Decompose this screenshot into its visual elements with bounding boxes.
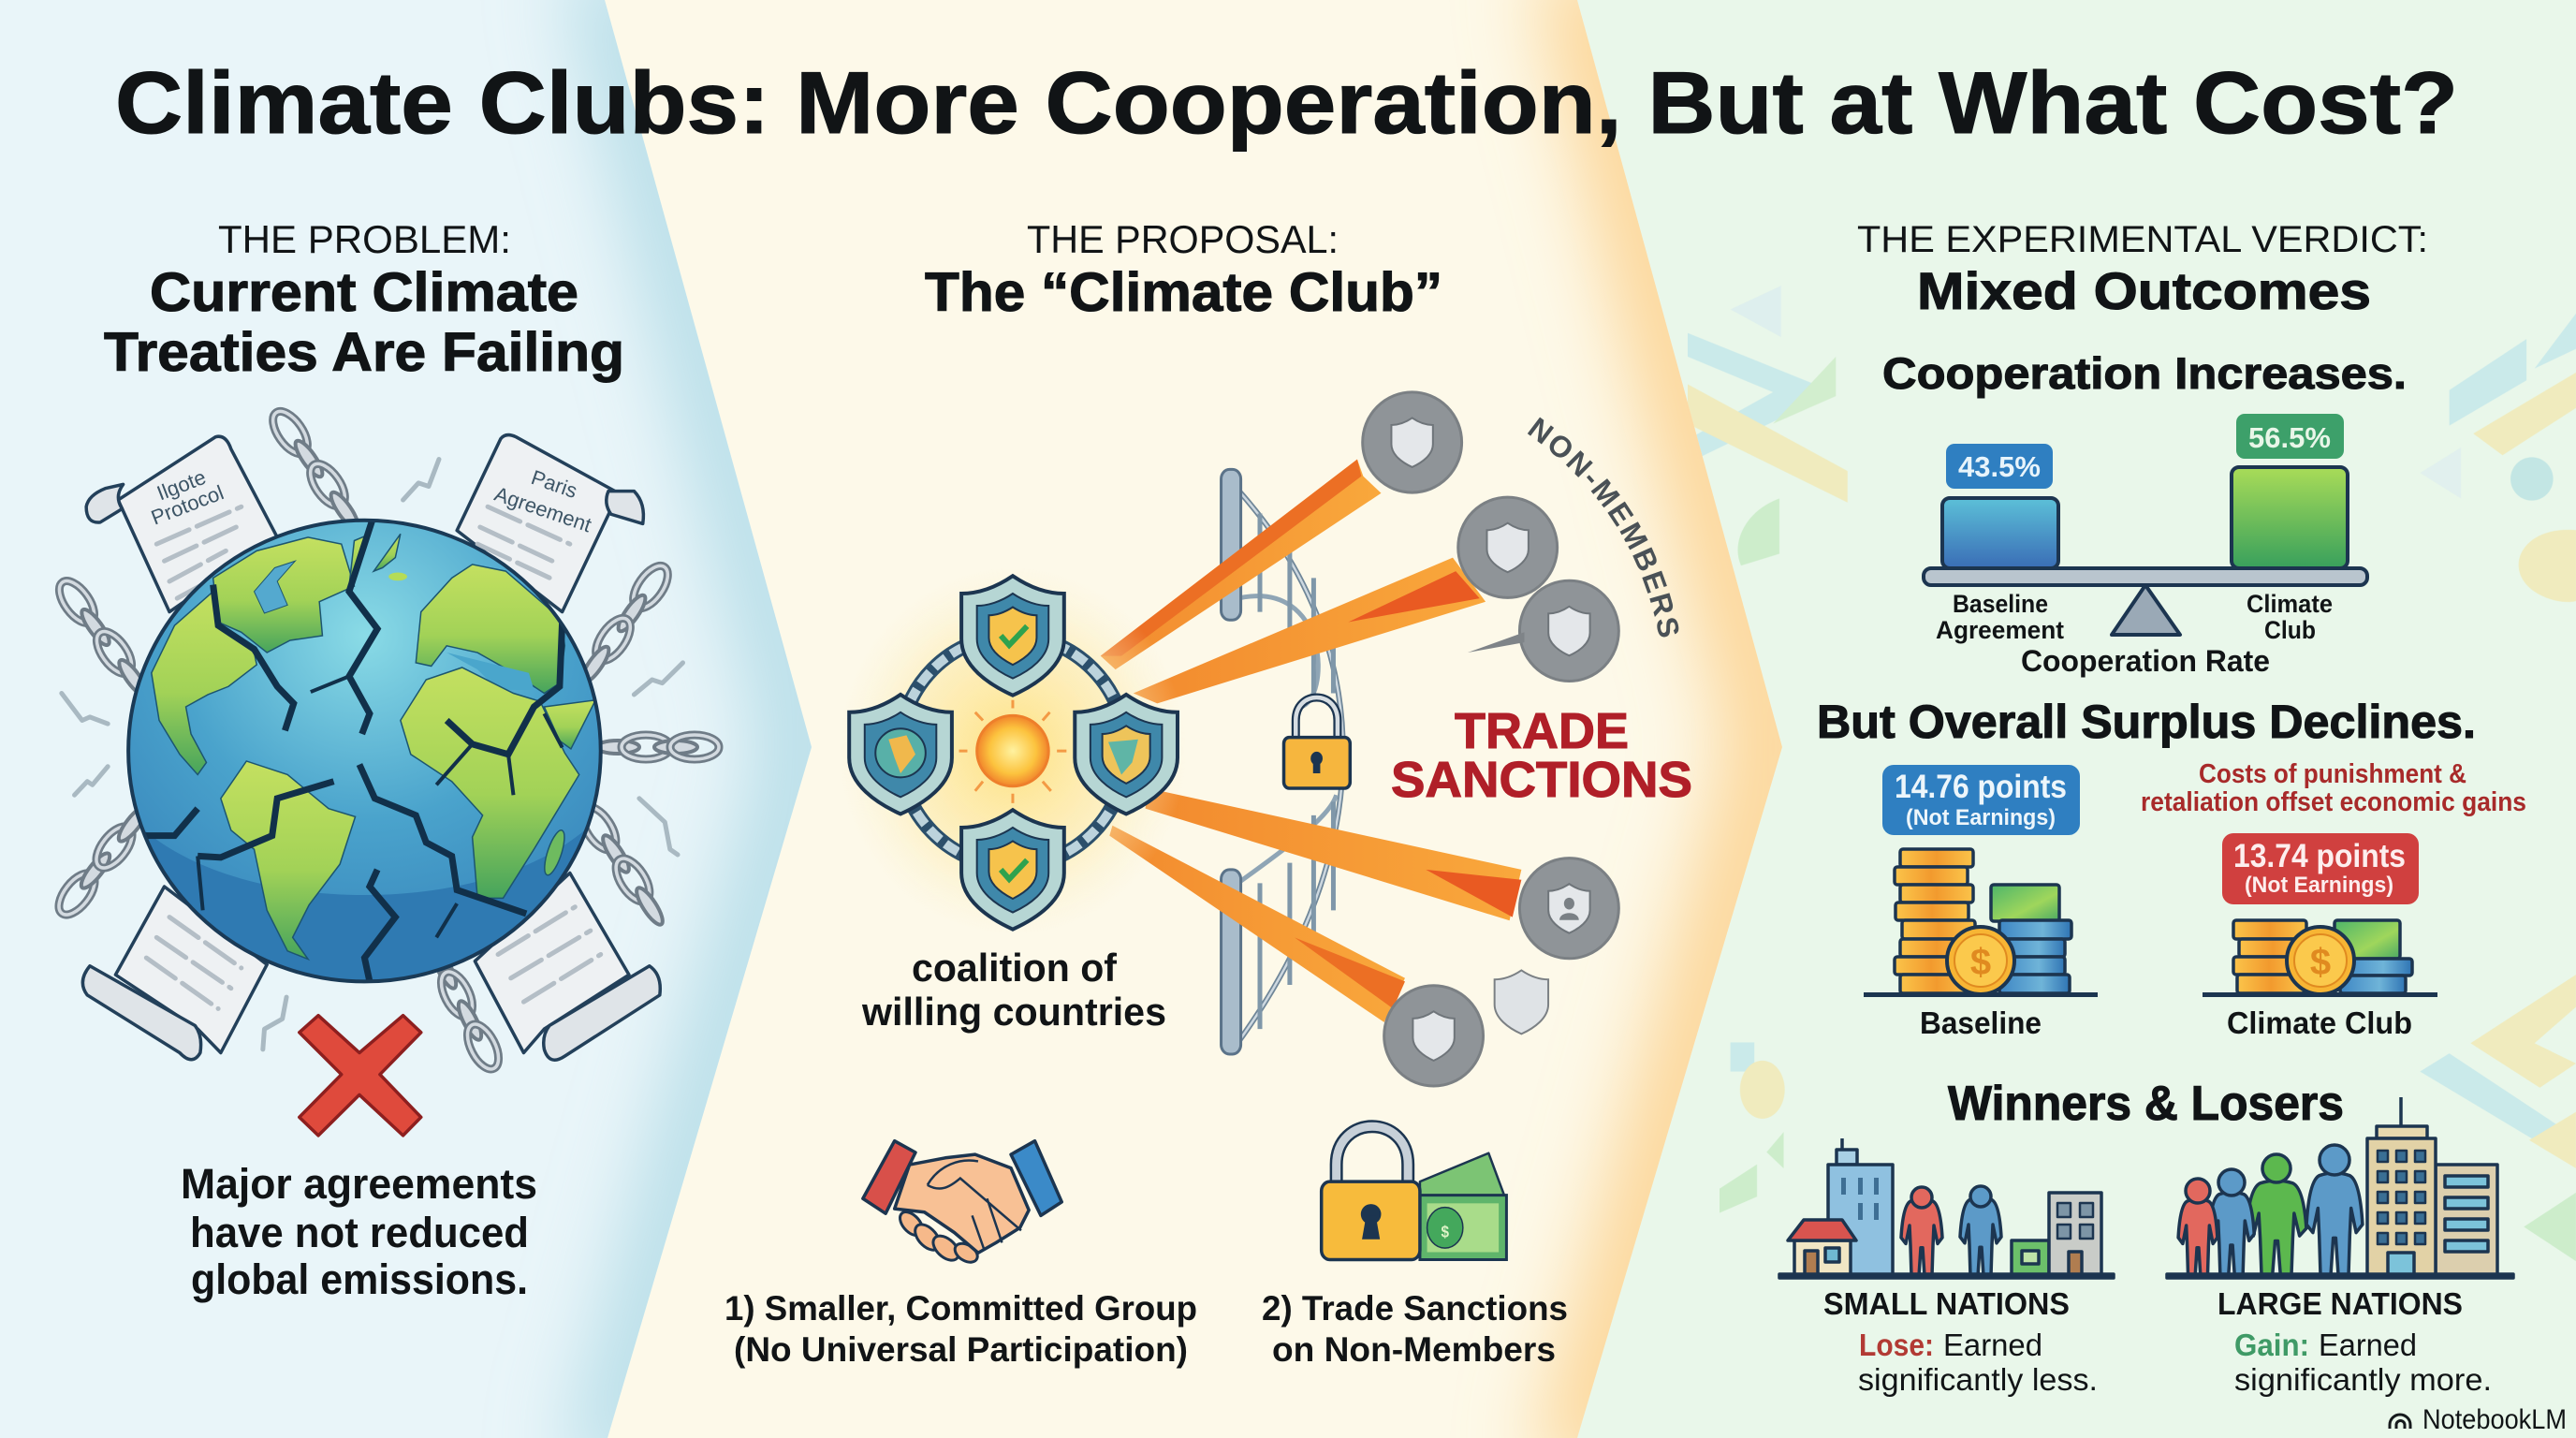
callout: baseline points: 14.76 points [1895, 769, 2067, 805]
panel background: left problem [0, 0, 824, 1438]
gate barrier [1222, 469, 1343, 1054]
motion squiggles [62, 460, 683, 1049]
text: major agreements: global emissions. [191, 1255, 528, 1303]
text: large nations: LARGE NATIONS [2217, 1286, 2463, 1321]
shield: left [849, 695, 952, 814]
scroll: Kyoto Protocol [86, 436, 277, 612]
heading: winners and losers: Winners & Losers [1948, 1077, 2344, 1131]
heading: verdict: THE EXPERIMENTAL VERDICT: [1857, 219, 2428, 260]
icon: red X [300, 1016, 421, 1136]
note: costs of punishment: Costs of punishment & [2199, 759, 2466, 789]
panel background: middle proposal [599, 0, 1797, 1438]
chain ring [900, 636, 1126, 866]
heading: the problem: Current Climate [150, 262, 578, 323]
heading: the problem [104, 217, 624, 383]
text: small nations [1823, 1286, 2098, 1397]
heading: the problem: THE PROBLEM: [218, 217, 511, 261]
scroll: Paris Agreement [457, 435, 643, 612]
scroll: lower left [82, 887, 267, 1060]
icon: baseline coin stack: $ [1970, 942, 1991, 983]
icon: lock and money [1322, 1126, 1506, 1259]
panel: the experimental verdict [1779, 219, 2526, 1397]
scroll: Paris Agreement: Paris [528, 465, 580, 503]
shield: bottom [961, 810, 1064, 930]
text: smaller committed group: 1) Smaller, Committed Group [724, 1289, 1197, 1328]
text: major agreements [181, 1160, 537, 1303]
non-member nodes [1363, 392, 1618, 1086]
bar: climate club [2232, 414, 2348, 568]
illustration: large nations [2167, 1097, 2513, 1278]
text: large nations: Gain: [2234, 1328, 2309, 1362]
curved label: non-members: NON-MEMBERS [1520, 418, 1679, 651]
chains [52, 405, 719, 1074]
fulcrum [2112, 585, 2180, 635]
icon: climate club coin stack: $ [2310, 942, 2331, 983]
icon: handshake [863, 1141, 1061, 1266]
text: smaller committed group [724, 1289, 1197, 1369]
callout: climate club points: 13.74 points [2233, 838, 2406, 874]
label: trade sanctions: SANCTIONS [1391, 752, 1692, 808]
label: baseline: Baseline [1920, 1005, 2042, 1040]
icon: climate club coin stack [2203, 920, 2437, 997]
diagram: club and sanctions [847, 390, 1692, 1088]
text: trade sanctions on non-members: 2) Trade Sanctions [1262, 1289, 1568, 1328]
labels: Cooperation Rate [2021, 644, 2270, 678]
label: coalition [861, 946, 1166, 1034]
scroll: Kyoto Protocol: Protocol [148, 480, 227, 530]
text: smaller committed group: (No Universal Participation) [734, 1330, 1188, 1369]
sun [959, 700, 1066, 803]
text: trade sanctions on non-members: on Non-Members [1272, 1330, 1556, 1369]
note: costs of punishment [2141, 759, 2526, 817]
heading: verdict: Mixed Outcomes [1917, 261, 2371, 320]
illustration: small nations [1779, 1138, 2114, 1278]
text: major agreements: Major agreements [181, 1160, 537, 1208]
decorative geometric shapes [1688, 286, 2576, 1261]
scroll: Paris Agreement: Agreement [491, 482, 594, 536]
illustration: cracked globe in chains with treaty scrolls [52, 405, 719, 1136]
panel: the proposal [724, 217, 1692, 1369]
icon: lock and money: $ [1441, 1224, 1449, 1241]
globe [124, 521, 606, 985]
label: trade sanctions [1391, 703, 1692, 808]
scroll: lower right [475, 873, 660, 1060]
callout: baseline points [1882, 765, 2080, 835]
label: coalition: willing countries [861, 990, 1166, 1034]
labels: Climate [2247, 590, 2333, 618]
labels [1936, 590, 2333, 678]
title: Climate Clubs: More Cooperation, But at What Cost? [115, 53, 2458, 152]
bar: climate club: 56.5% [2248, 421, 2331, 454]
bar: baseline [1942, 444, 2058, 568]
callout: climate club points [2222, 833, 2419, 904]
text: small nations: SMALL NATIONS [1823, 1286, 2070, 1321]
text: small nations: significantly less. [1858, 1362, 2098, 1397]
note: costs of punishment: retaliation offset economic gains [2141, 787, 2526, 817]
label: climate club: Climate Club [2227, 1005, 2412, 1040]
text: large nations: Earned [2319, 1328, 2417, 1362]
glow [840, 567, 1186, 934]
scroll: Kyoto Protocol: Ilgote [154, 465, 209, 505]
text: large nations: significantly more. [2234, 1362, 2492, 1397]
beam [1924, 568, 2367, 585]
padlock on gate [1284, 697, 1350, 788]
text: small nations: Lose: [1859, 1328, 1934, 1362]
labels: Club [2264, 616, 2316, 644]
text: large nations [2217, 1286, 2492, 1397]
heading: surplus declines: But Overall Surplus Declines. [1817, 696, 2476, 748]
panel: the problem [52, 217, 719, 1303]
heading: verdict [1857, 219, 2428, 320]
sanction beams [1101, 460, 1521, 1022]
heading: the proposal: THE PROPOSAL: [1027, 217, 1339, 261]
heading: the proposal [925, 217, 1442, 323]
shield: right [1075, 695, 1178, 814]
labels: Agreement [1936, 616, 2064, 644]
label: coalition: coalition of [912, 946, 1118, 990]
shield: top [961, 576, 1064, 696]
chart: cooperation rate balance [1924, 414, 2367, 678]
text: major agreements: have not reduced [190, 1209, 529, 1256]
heading: the proposal: The “Climate Club” [925, 262, 1442, 323]
callout: baseline points: (Not Earnings) [1906, 805, 2056, 830]
heading: cooperation increases: Cooperation Increases. [1882, 348, 2407, 398]
bar: baseline: 43.5% [1958, 450, 2041, 483]
callout: climate club points: (Not Earnings) [2245, 873, 2393, 898]
icon: baseline coin stack [1864, 849, 2098, 997]
labels: Baseline [1953, 590, 2048, 618]
text: trade sanctions on non-members [1262, 1289, 1568, 1369]
grey arc band [1342, 504, 1451, 972]
heading: the problem: Treaties Are Failing [104, 322, 624, 383]
text: small nations: Earned [1943, 1328, 2042, 1362]
label: trade sanctions: TRADE [1455, 703, 1629, 759]
